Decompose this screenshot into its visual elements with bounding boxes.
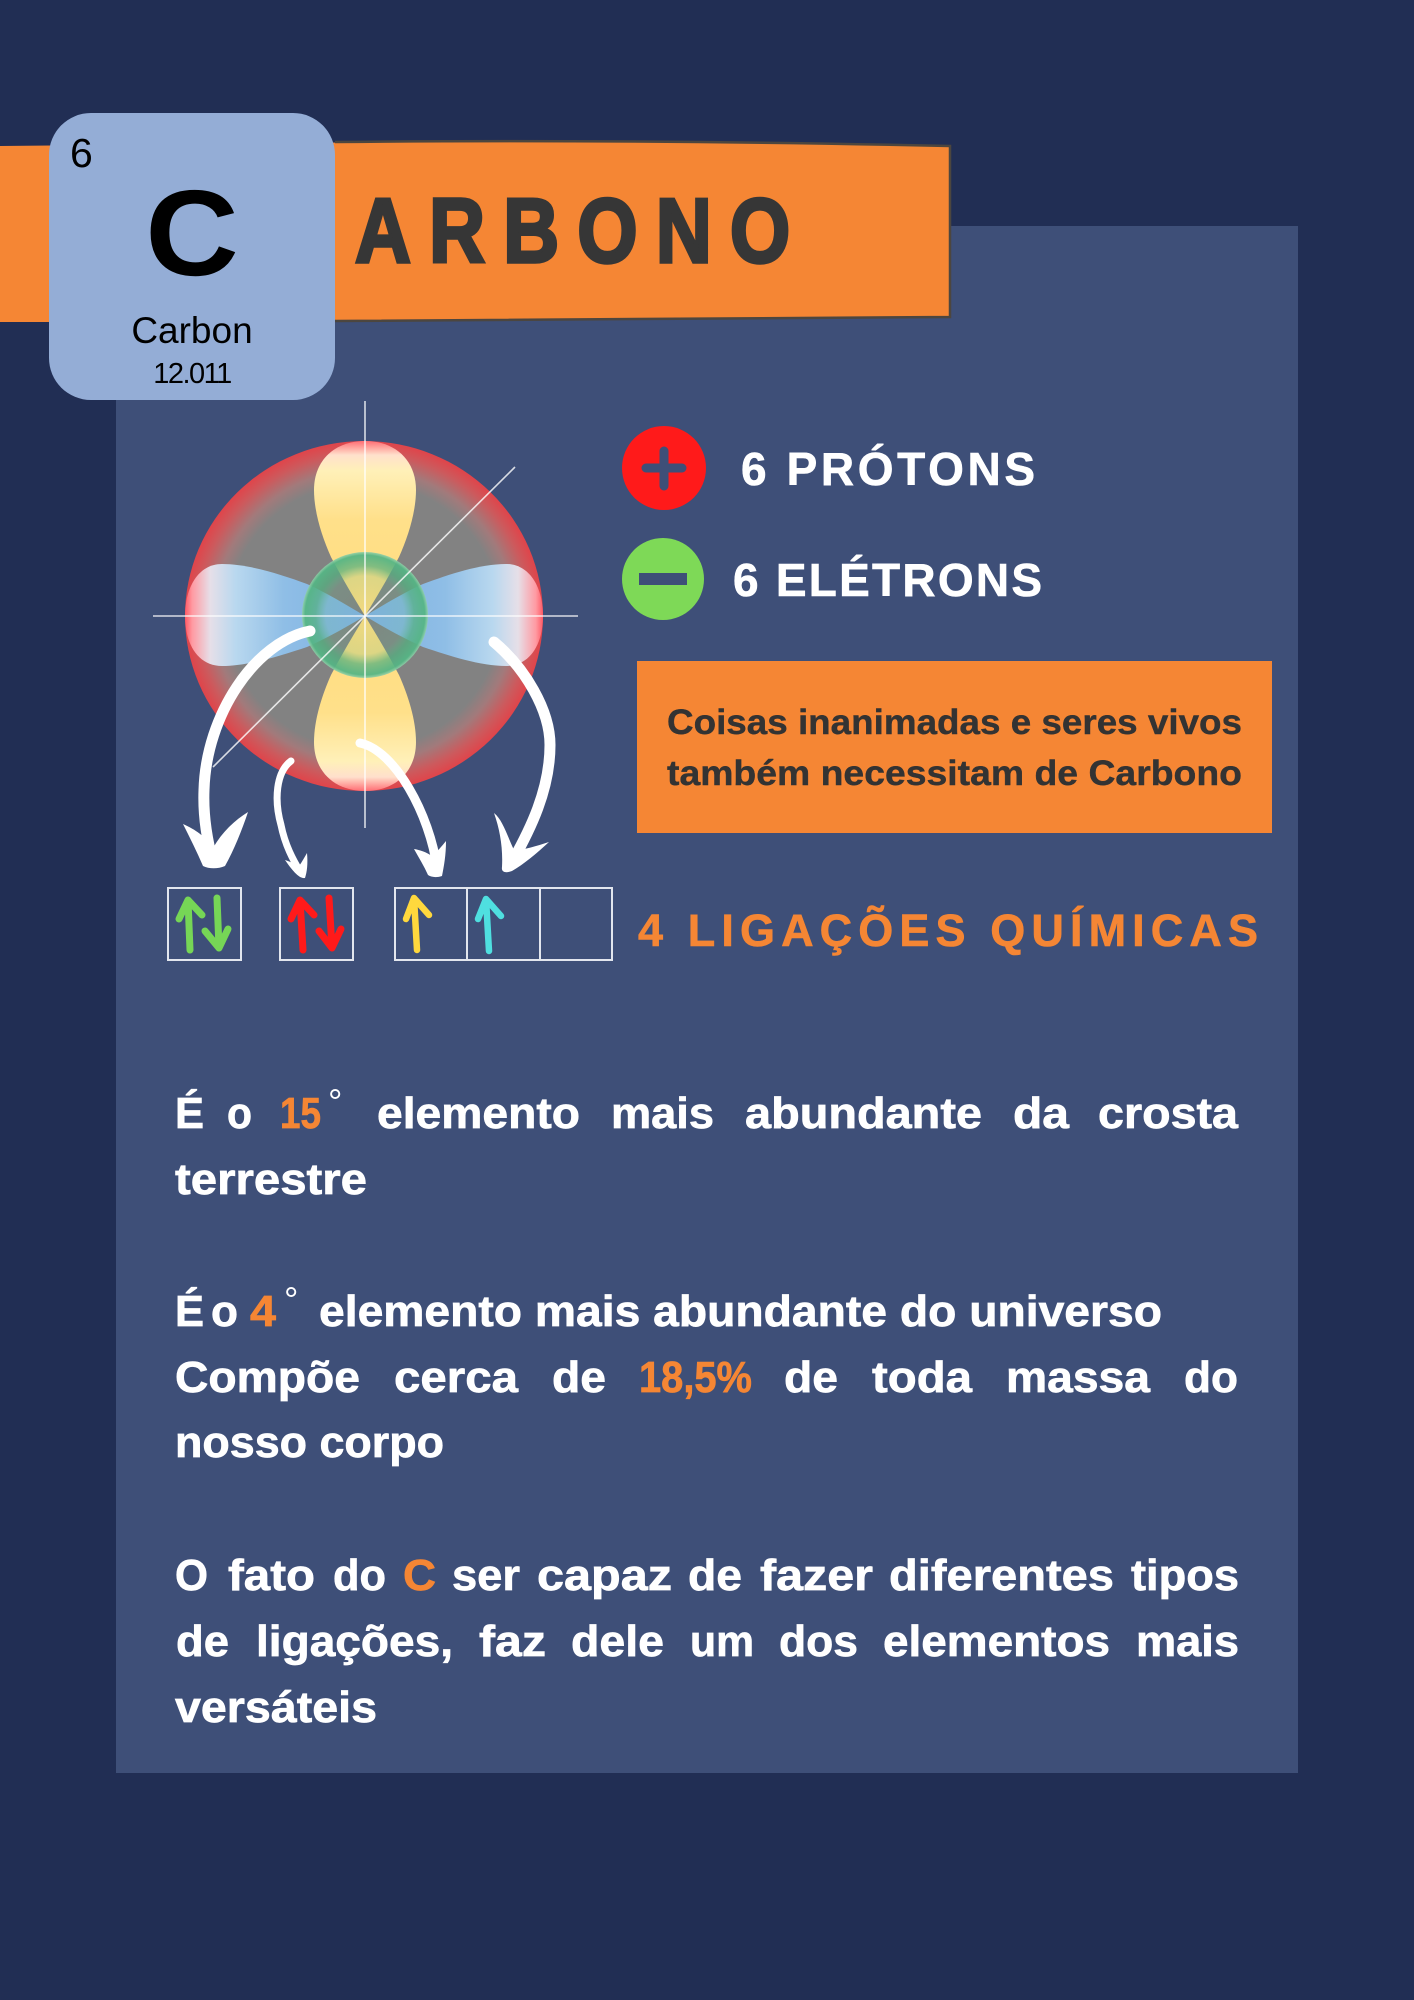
text block: crust abundance: elemento bbox=[377, 1089, 580, 1138]
text block: versatility: elementos bbox=[883, 1617, 1110, 1666]
axes bbox=[153, 401, 578, 828]
cyan spin arrow bbox=[478, 899, 501, 951]
text block: universe and body mass: do bbox=[1184, 1353, 1238, 1402]
text block: universe and body mass bbox=[175, 1279, 1238, 1467]
text block: versatility: dele bbox=[571, 1617, 664, 1666]
electrons label: 6 ELÉTRONS bbox=[733, 554, 1042, 606]
text block: versatility: C bbox=[403, 1551, 436, 1600]
callout box: também necessitam de Carbono bbox=[667, 754, 1242, 793]
text block: universe and body mass: o bbox=[211, 1287, 238, 1336]
atom orbital diagram bbox=[153, 401, 612, 960]
yellow orbital lobes bbox=[314, 441, 416, 791]
text block: crust abundance: terrestre bbox=[175, 1155, 367, 1204]
text block: universe and body mass: Compõe bbox=[175, 1353, 360, 1402]
text block: universe and body mass: 4 bbox=[250, 1287, 277, 1336]
text block: versatility: fato bbox=[228, 1551, 315, 1600]
element symbol: C bbox=[145, 164, 239, 301]
text block: universe and body mass: ° bbox=[284, 1279, 298, 1320]
text block: universe and body mass: 18,5% bbox=[639, 1353, 752, 1402]
protons label: 6 PRÓTONS bbox=[741, 443, 1035, 495]
text block: versatility: um bbox=[690, 1617, 754, 1666]
red spin arrows bbox=[291, 898, 341, 950]
text block: versatility: capaz bbox=[537, 1551, 672, 1600]
icon: electron minus bbox=[622, 538, 704, 620]
icon: proton plus bbox=[622, 426, 706, 510]
text block: universe and body mass: É bbox=[175, 1286, 204, 1336]
text block: universe and body mass: nosso corpo bbox=[175, 1418, 444, 1467]
atomic number: 6 bbox=[70, 130, 93, 176]
text block: versatility: do bbox=[333, 1551, 386, 1600]
text block: versatility: mais bbox=[1136, 1617, 1239, 1666]
blue orbital lobes bbox=[185, 564, 543, 666]
text block: versatility: de bbox=[176, 1617, 229, 1666]
text block: universe and body mass: cerca bbox=[394, 1353, 519, 1402]
periodic table tile bbox=[49, 113, 335, 400]
text block: versatility: fazer bbox=[760, 1551, 873, 1600]
text block: crust abundance: da bbox=[1013, 1089, 1070, 1138]
text block: versatility: dos bbox=[779, 1617, 858, 1666]
yellow spin arrow bbox=[406, 898, 429, 950]
callout box bbox=[637, 661, 1272, 833]
text block: versatility: faz bbox=[479, 1617, 546, 1666]
title banner bbox=[0, 141, 950, 322]
atomic mass: 12.011 bbox=[153, 358, 231, 390]
text block: versatility: ser bbox=[452, 1551, 520, 1600]
text block: universe and body mass: massa bbox=[1006, 1353, 1151, 1402]
text block: crust abundance: É bbox=[175, 1088, 204, 1138]
text block: versatility: O bbox=[175, 1551, 208, 1600]
curved white arrows bbox=[183, 631, 550, 878]
electron boxes bbox=[168, 888, 612, 960]
text block: crust abundance bbox=[175, 1081, 1239, 1204]
panel: content card bbox=[116, 226, 1298, 1773]
text block: universe and body mass: de bbox=[552, 1353, 606, 1402]
chemical bonds heading: 4 LIGAÇÕES QUÍMICAS bbox=[638, 905, 1258, 956]
text block: crust abundance: abundante bbox=[745, 1089, 982, 1138]
core sphere bbox=[302, 552, 428, 678]
text block: universe and body mass: de bbox=[784, 1353, 838, 1402]
text block: versatility bbox=[175, 1551, 1239, 1732]
electron cloud bbox=[185, 441, 543, 791]
text block: versatility: ligações, bbox=[256, 1617, 453, 1666]
text block: crust abundance: o bbox=[227, 1089, 252, 1138]
element name: Carbon bbox=[131, 310, 253, 351]
text block: universe and body mass: toda bbox=[872, 1353, 973, 1402]
text block: versatility: versáteis bbox=[175, 1683, 377, 1732]
callout box: Coisas inanimadas e seres vivos bbox=[667, 703, 1242, 742]
text block: versatility: tipos bbox=[1131, 1551, 1239, 1600]
text block: crust abundance: mais bbox=[611, 1089, 714, 1138]
text block: crust abundance: crosta bbox=[1098, 1089, 1239, 1138]
green spin arrows bbox=[179, 898, 228, 950]
text block: universe and body mass: elemento mais abundante do universo bbox=[319, 1287, 1162, 1336]
text block: crust abundance: ° bbox=[328, 1081, 342, 1122]
text block: versatility: de bbox=[688, 1551, 742, 1600]
text block: versatility: diferentes bbox=[889, 1551, 1114, 1600]
text block: crust abundance: 15 bbox=[280, 1089, 321, 1138]
title text: ARBONO bbox=[355, 180, 790, 281]
